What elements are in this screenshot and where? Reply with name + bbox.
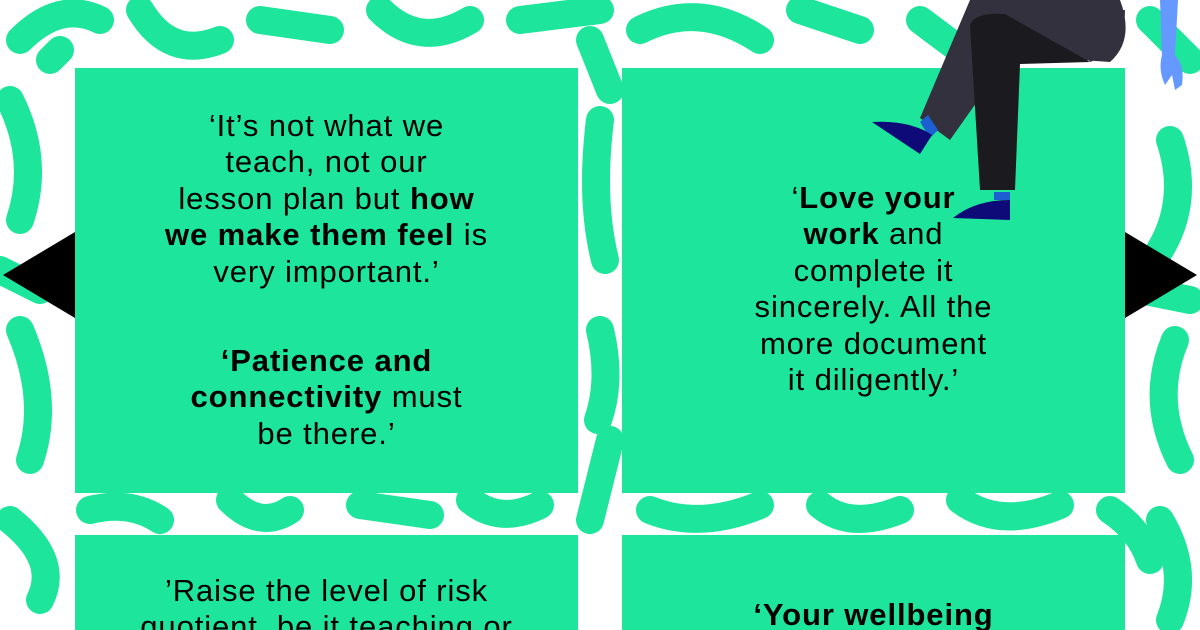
text: quote 4 — [140, 573, 513, 630]
illustration: sitting person legs — [872, 0, 1183, 220]
text: quote 1: lesson plan but how — [178, 181, 475, 216]
text: quote 3 — [755, 180, 992, 397]
text: quote 1: we make them feel is — [165, 217, 488, 252]
text: quote 1 — [164, 108, 488, 289]
text: quote 3: more document — [760, 326, 987, 361]
arrow: left — [3, 232, 75, 318]
text: quote 3: complete it — [794, 253, 953, 288]
text: quote 1: teach, not our — [225, 144, 428, 179]
text: quote 2 — [190, 343, 462, 451]
panel: bottom-left quote — [75, 535, 578, 630]
arrow: right — [1125, 232, 1197, 318]
text: quote 3: ‘Love your — [791, 180, 956, 215]
text: quote 2: ‘Patience and — [221, 343, 432, 378]
text: quote 3: work and — [804, 216, 943, 251]
text: quote 2: be there.’ — [257, 416, 396, 451]
panel: top-right quote — [622, 68, 1125, 493]
text: quote 3: sincerely. All the — [755, 289, 992, 324]
text: quote 3: it diligently.’ — [788, 362, 959, 397]
panel: bottom-right quote — [622, 535, 1125, 630]
text: quote 1: very important.’ — [213, 254, 440, 289]
text: quote 2: connectivity must — [190, 379, 462, 414]
text: quote 4: ’Raise the level of risk — [165, 573, 488, 608]
panel: top-left quote — [75, 68, 578, 493]
text: quote 1: ‘It’s not what we — [209, 108, 444, 143]
